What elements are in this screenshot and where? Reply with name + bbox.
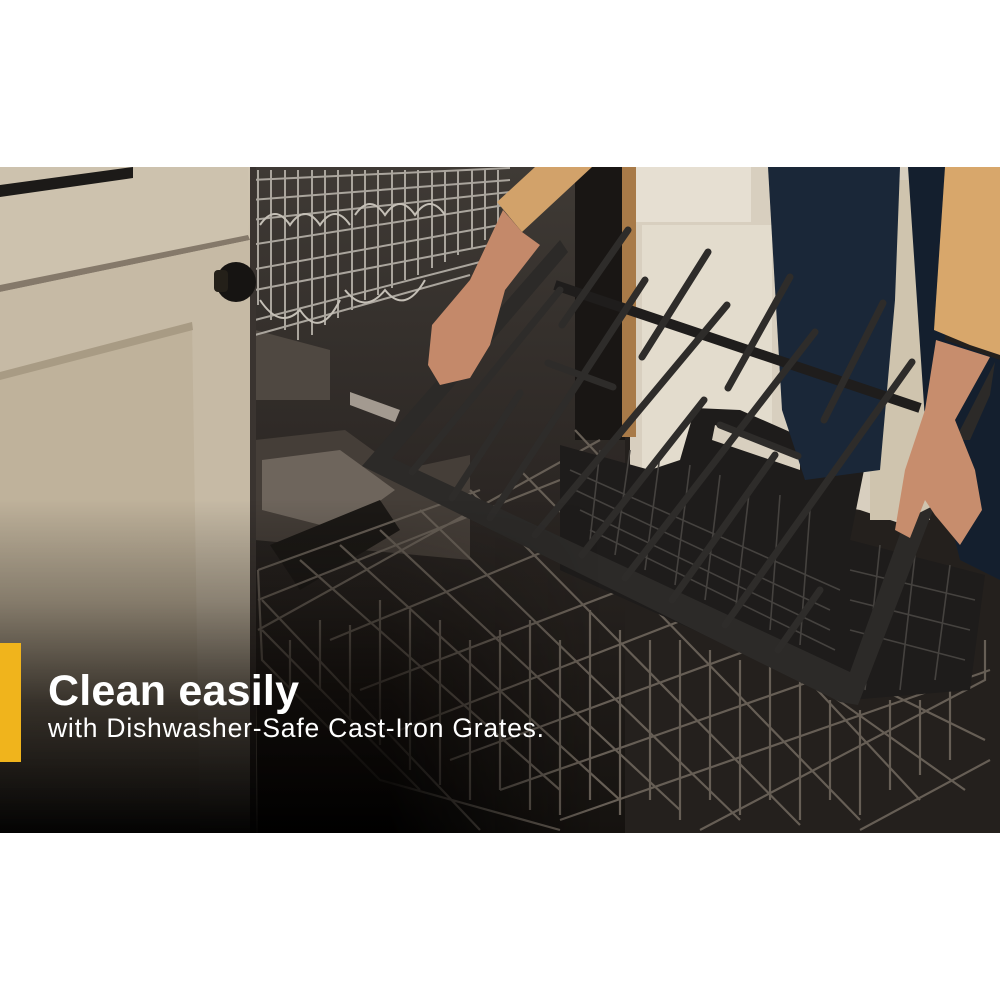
subheading: with Dishwasher-Safe Cast-Iron Grates. [47,713,544,743]
cast-iron grate [362,230,995,705]
person: left arm and hand [428,167,592,385]
cutlery basket [560,408,985,700]
heading: Clean easily [48,667,299,715]
cabinet door with handle and knob [0,167,258,833]
dishwasher tub interior [250,167,636,833]
right cabinet [630,167,930,530]
dark bottom gradient [0,500,600,840]
photo: dishwasher scene [0,167,1000,840]
yellow accent bar [0,643,21,762]
person: jeans [768,167,1000,580]
infographic canvas [0,167,1000,833]
upper dish rack [250,168,510,340]
lower dish rack [258,430,990,830]
person: right arm and hand [895,167,1000,545]
